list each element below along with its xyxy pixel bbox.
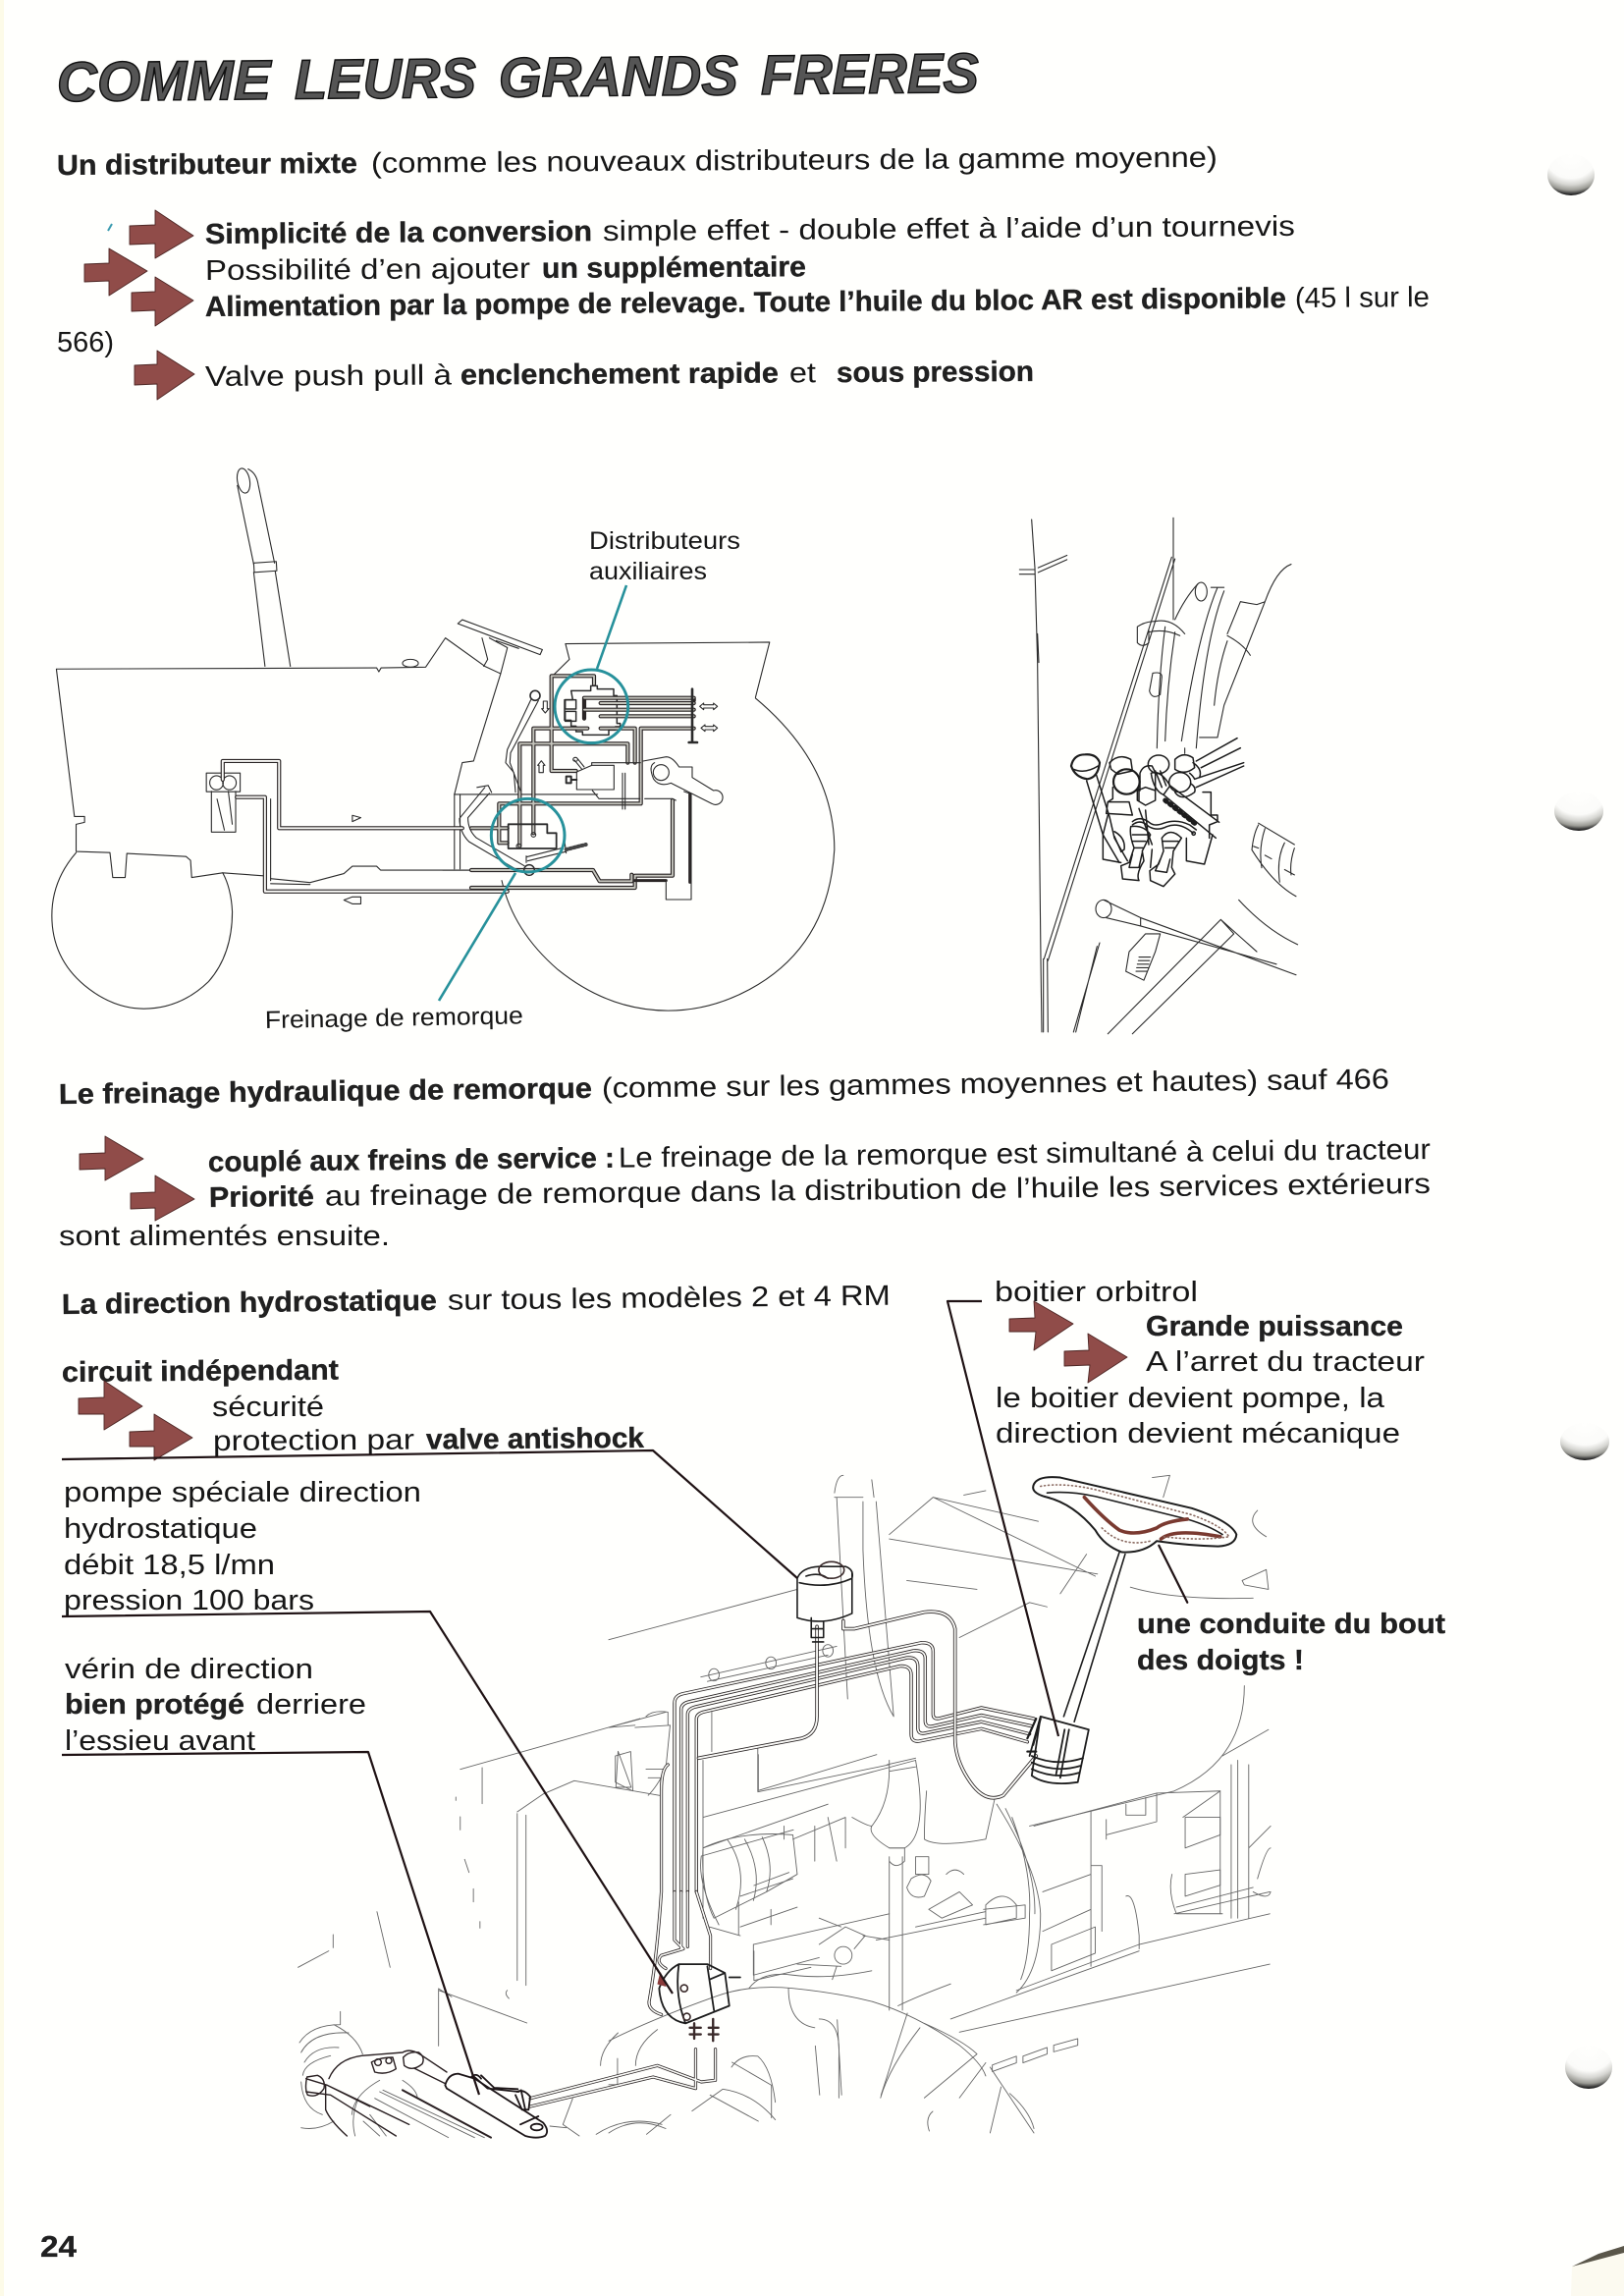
page corner fold [1571, 2246, 1624, 2296]
left chassis line work [298, 1719, 933, 2134]
bullet: couplé: Le freinage de la remorque est simultané à celui du tracteur [619, 1134, 1431, 1175]
callout: une conduite: une conduite du bout [1137, 1609, 1445, 1640]
text: circuit indépendant: circuit indépendant [62, 1355, 339, 1389]
steering column [1063, 1552, 1125, 1722]
label: distributeurs auxiliaires: auxiliaires [589, 558, 707, 585]
arrow 9 [1009, 1301, 1073, 1350]
steering wheel [1033, 1477, 1236, 1553]
arrow 5 [80, 1136, 143, 1180]
heading: un distributeur mixte: Un distributeur mixte [57, 148, 357, 182]
heading: freinage hydraulique: (comme sur les gammes moyennes et hautes) sauf 466 [602, 1064, 1389, 1105]
heading: un distributeur mixte: (comme les nouveaux distributeurs de la gamme moyenne) [371, 142, 1218, 180]
tractor hydraulic detail [471, 670, 723, 900]
tractor fuel unit and left pipes [206, 761, 508, 892]
text: protection: protection par [213, 1425, 414, 1457]
bullet: possibilité [205, 251, 806, 287]
reservoir [797, 1566, 852, 1642]
title: FRERES [760, 42, 979, 107]
diagram: steering system illustration [298, 1475, 1271, 2138]
heading: freinage hydraulique [59, 1064, 1389, 1111]
heading: un distributeur mixte [57, 142, 1218, 182]
heading: freinage hydraulique: Le freinage hydraulique de remorque [59, 1073, 592, 1111]
text: arret du tracteur: direction devient mécanique [996, 1418, 1400, 1449]
bullet: priorité: Priorité [209, 1181, 314, 1214]
text: 566: 566) [57, 327, 114, 358]
bullet: valve push pull: et [789, 357, 816, 389]
title: GRANDS [498, 44, 738, 110]
title [57, 42, 979, 114]
arrow 2 [84, 248, 147, 296]
binder hole shadows [1547, 154, 1612, 2089]
text: vérin de direction: derriere [256, 1689, 366, 1721]
text: protection [213, 1423, 645, 1457]
text: vérin de direction: vérin de direction [65, 1654, 313, 1685]
callout line: freinage [439, 873, 515, 1001]
title: LEURS [294, 47, 476, 112]
text: boitier orbitrol: boitier orbitrol [995, 1277, 1198, 1308]
text: arret du tracteur: le boitier devient pompe, la [996, 1383, 1385, 1414]
arrow 7 [79, 1381, 142, 1430]
bullet: couplé: couplé aux freins de service : [208, 1143, 615, 1178]
callout line: distributeurs [597, 585, 626, 669]
bullet: alimentation: Alimentation par la pompe de relevage. Toute l’huile du bloc AR est disponible [205, 283, 1286, 323]
panel: distributeur mixte [57, 142, 1430, 400]
lower steering pipes [530, 2050, 716, 2106]
arrow 8 [130, 1414, 192, 1460]
bullet: valve push pull: sous pression [837, 356, 1034, 389]
text: pompe spéciale: pompe spéciale direction [64, 1477, 421, 1508]
text: vérin de direction [65, 1654, 366, 1757]
text: pompe spéciale: débit 18,5 l/mn [64, 1550, 275, 1581]
tractor silhouette [52, 467, 835, 1011]
text: sont alimentés: sont alimentés ensuite. [59, 1221, 390, 1252]
bullet: valve push pull [205, 356, 1034, 393]
panel: freinage hydraulique [59, 1064, 1431, 1252]
bullet: simplicité: Simplicité de la conversion [205, 216, 592, 250]
bullet: couplé [208, 1134, 1431, 1178]
label: distributeurs auxiliaires: Distributeurs [589, 527, 740, 555]
heading: direction hydrostatique: sur tous les modèles 2 et 4 RM [448, 1281, 891, 1317]
leader line: pompe [62, 1612, 673, 1994]
label: distributeurs auxiliaires [589, 527, 740, 585]
text: pompe spéciale: pression 100 bars [64, 1585, 314, 1616]
text: protection: valve antishock [426, 1423, 645, 1455]
panel: direction hydrostatique [62, 1277, 1445, 2095]
bullet: valve push pull: enclenchement rapide [460, 357, 779, 391]
bullet: possibilité: Possibilité d’en ajouter [205, 253, 530, 287]
callout: une conduite: des doigts ! [1137, 1645, 1304, 1676]
page number: 24 [40, 2229, 78, 2264]
callout: une conduite [1137, 1609, 1445, 1676]
text: vérin de direction: bien protégé [65, 1689, 244, 1721]
bullet: simplicité [205, 211, 1295, 250]
arrow 6 [131, 1175, 194, 1221]
diagram: tractor hydraulic schematic [52, 467, 835, 1034]
leader line: vérin [62, 1752, 479, 2095]
text: pompe spéciale: hydrostatique [64, 1513, 257, 1545]
bullet: alimentation: (45 l sur le [1295, 282, 1430, 314]
title: COMME [57, 49, 273, 114]
frame and surroundings [1019, 518, 1298, 1034]
engine line work [609, 1475, 1271, 2133]
hydraulic pipes [649, 1477, 1236, 2041]
bullet: valve push pull: Valve push pull à [205, 359, 453, 393]
distributor valve cluster [1071, 738, 1244, 887]
text: arret du tracteur: A l’arret du tracteur [1146, 1346, 1425, 1378]
front axle and steering cylinder [299, 1989, 579, 2138]
leader line: réservoir [62, 1450, 797, 1578]
arrow 3 [132, 277, 193, 326]
heading: direction hydrostatique [62, 1281, 891, 1321]
teal speck [108, 224, 112, 231]
diagram: distributor close-up [1019, 518, 1298, 1034]
text: sécurité: sécurité [212, 1392, 324, 1423]
bullet: possibilité: un supplémentaire [542, 251, 806, 285]
text: grande puissance: Grande puissance [1146, 1311, 1403, 1342]
arrow 1 [130, 210, 193, 258]
leader line: orbitrol [947, 1301, 1058, 1736]
pump [659, 1964, 740, 2023]
bullet: priorité: au freinage de remorque dans la distribution de l’huile les services extérieurs [325, 1169, 1431, 1213]
orbitrol box [1030, 1717, 1089, 1783]
text: arret du tracteur [996, 1346, 1425, 1449]
arrow 10 [1064, 1334, 1127, 1383]
heading: direction hydrostatique: La direction hydrostatique [62, 1285, 437, 1321]
arrow 4 [135, 351, 194, 400]
text: pompe spéciale [64, 1477, 421, 1616]
bullet: simplicité: simple effet - double effet à l’aide d’un tournevis [603, 211, 1295, 247]
label: freinage de remorque: Freinage de remorque [265, 1002, 523, 1034]
text: vérin de direction: l’essieu avant [65, 1725, 255, 1757]
